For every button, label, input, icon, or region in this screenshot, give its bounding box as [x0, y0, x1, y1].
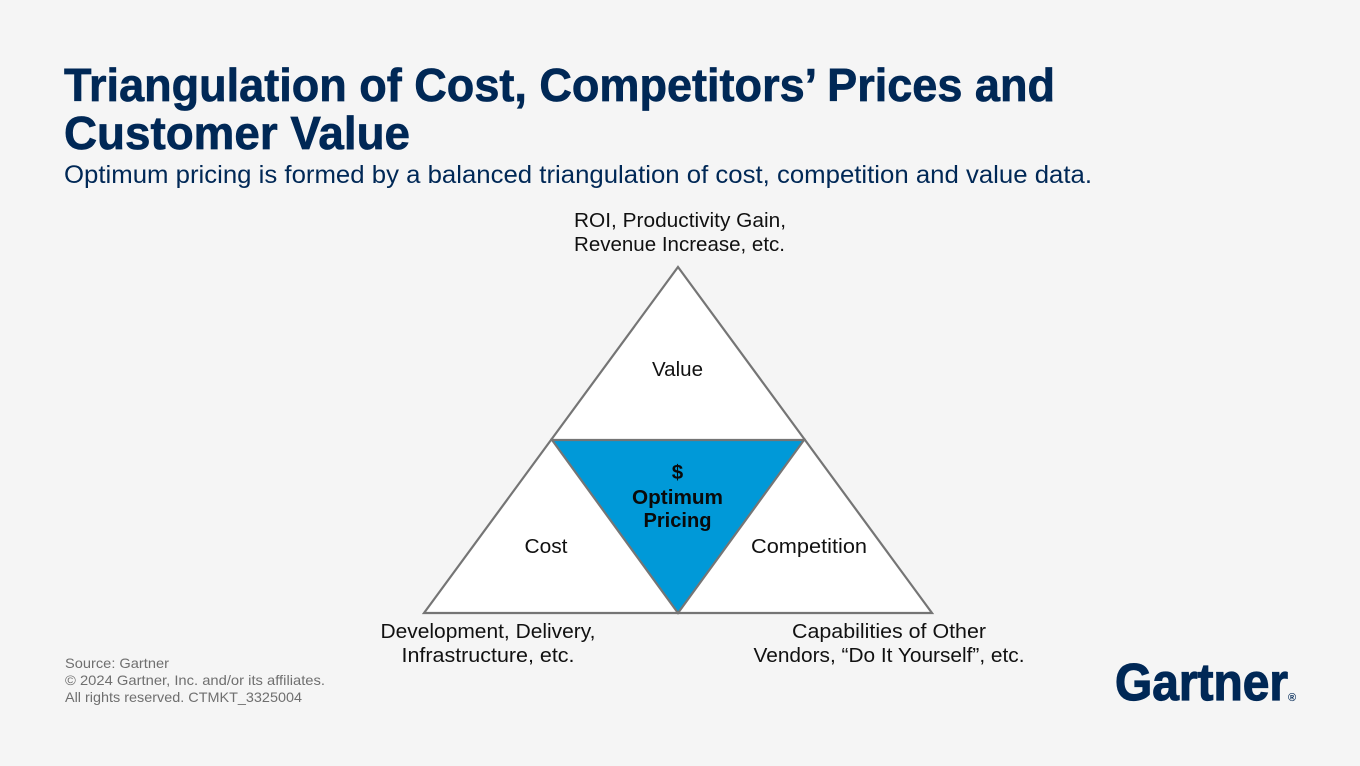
title	[64, 59, 1055, 159]
center triangle: optimum pricing	[552, 440, 804, 613]
label: optimum pricing	[632, 461, 723, 532]
top label: value drivers: ROI, Productivity Gain,	[574, 209, 786, 232]
logo: Gartner: Gartner	[1115, 654, 1288, 712]
triangle diagram	[424, 267, 932, 613]
bottom left label: cost drivers: Infrastructure, etc.	[402, 644, 574, 667]
bottom right label: competition drivers	[754, 620, 1024, 667]
top label: value drivers: Revenue Increase, etc.	[574, 233, 785, 256]
label: value: Value	[652, 358, 703, 381]
bottom left label: cost drivers: Development, Delivery,	[380, 620, 596, 643]
label: competition: Competition	[751, 535, 867, 558]
subtitle: Optimum pricing is formed by a balanced triangulation of cost, competition and value data.	[64, 161, 1092, 189]
label: optimum pricing: Pricing	[644, 509, 712, 532]
outer triangle	[424, 267, 932, 613]
label: cost: Cost	[524, 535, 568, 558]
bottom right label: competition drivers: Vendors, “Do It Yourself”, etc.	[754, 644, 1024, 667]
label: optimum pricing: $	[672, 461, 684, 484]
label: optimum pricing: Optimum	[632, 486, 723, 509]
title: Triangulation of Cost, Competitors’ Prices and	[64, 59, 1055, 111]
source and copyright: All rights reserved. CTMKT_3325004	[65, 689, 302, 705]
logo: Gartner: ®	[1288, 692, 1296, 704]
source and copyright	[65, 655, 325, 705]
top label: value drivers	[574, 209, 786, 256]
title: Customer Value	[64, 107, 410, 159]
bottom left label: cost drivers	[380, 620, 596, 667]
source and copyright: Source: Gartner	[65, 655, 169, 671]
bottom right label: competition drivers: Capabilities of Other	[792, 620, 986, 643]
source and copyright: © 2024 Gartner, Inc. and/or its affiliates.	[65, 672, 325, 688]
